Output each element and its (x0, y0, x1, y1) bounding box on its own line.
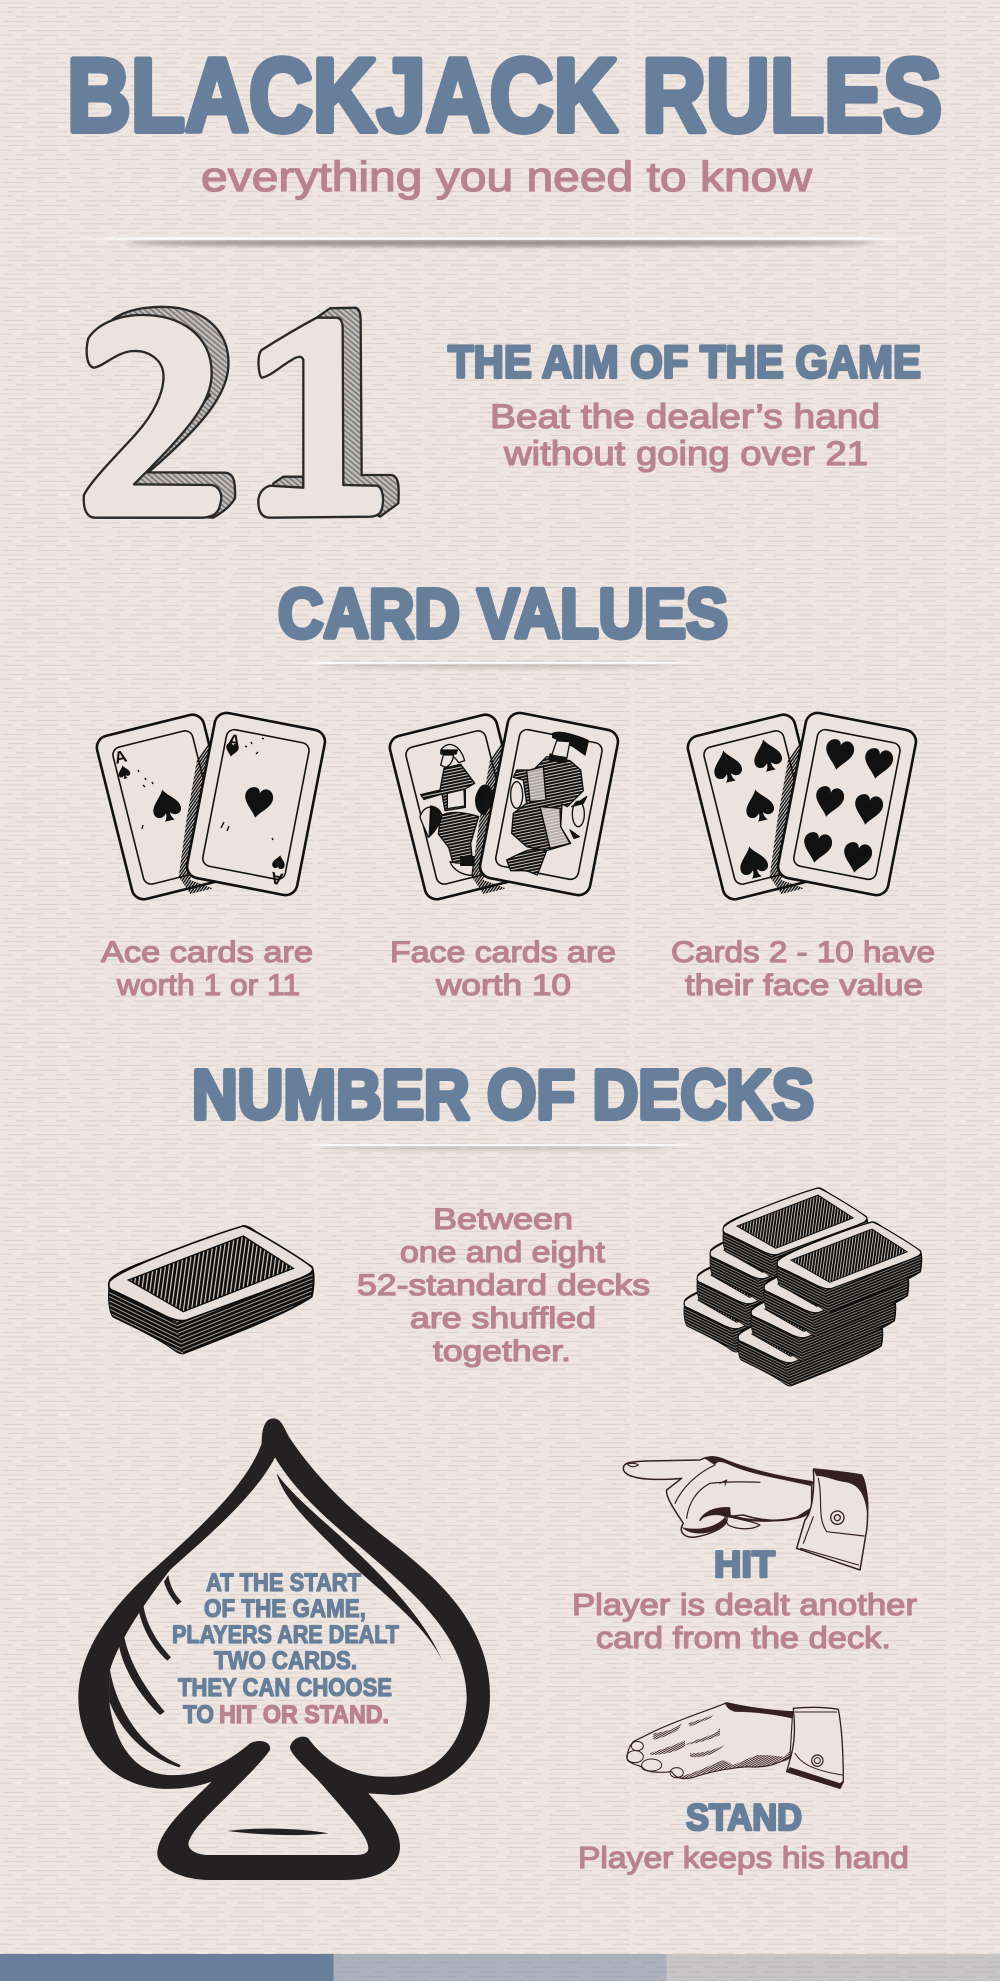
digit 1 (258, 308, 399, 518)
caption: number cards: their face value (685, 969, 923, 1002)
icon: face cards (387, 711, 620, 902)
icon: pointing hand (hit) (623, 1456, 868, 1570)
heading: the aim of the game: THE AIM OF THE GAME (448, 336, 921, 388)
text: inside the spade: TO (183, 1701, 214, 1729)
text: number of decks description: one and eight (400, 1236, 606, 1269)
text: hit description (572, 1587, 917, 1655)
caption: ace cards: Ace cards are (101, 936, 313, 969)
text: inside the spade (172, 1569, 399, 1729)
section divider (290, 662, 710, 668)
icon: single deck (109, 1226, 314, 1353)
caption: ace cards: worth 1 or 11 (116, 969, 300, 1002)
text: number of decks description: Between (433, 1203, 573, 1236)
caption: number cards (671, 936, 935, 1002)
caption: face cards: worth 10 (435, 969, 571, 1002)
text: inside the spade: PLAYERS ARE DEALT (172, 1621, 399, 1649)
icon: large spade outline (78, 1418, 490, 1880)
subtitle: everything you need to know (201, 153, 813, 200)
icon: ace cards: A (112, 746, 129, 768)
icon: number 21 (84, 307, 399, 518)
caption: number cards: Cards 2 - 10 have (671, 936, 935, 969)
text: number of decks description: together. (433, 1335, 571, 1368)
caption: face cards: Face cards are (390, 936, 616, 969)
icon: ace cards: A (269, 868, 285, 889)
icon: stack of decks (684, 1188, 922, 1386)
text: number of decks description: are shuffled (410, 1302, 596, 1335)
text: hit description: card from the deck. (596, 1620, 891, 1655)
text: aim description: without going over 21 (503, 435, 868, 473)
text: aim description (490, 398, 880, 473)
icon: number cards (685, 711, 918, 902)
text: hit description: Player is dealt another (572, 1587, 917, 1622)
figure: king (507, 732, 588, 875)
heading: hit: HIT (714, 1544, 775, 1585)
text: inside the spade: THEY CAN CHOOSE (178, 1674, 392, 1702)
section divider (290, 1144, 710, 1150)
header divider (60, 237, 940, 246)
icon: ace cards: A (226, 730, 242, 751)
footer colour bar (0, 1954, 1000, 1981)
icon: ace cards (94, 711, 327, 902)
text: number of decks description: 52-standard decks (357, 1269, 650, 1302)
heading: stand: STAND (686, 1797, 802, 1838)
heading: card values: CARD VALUES (278, 574, 728, 652)
caption: ace cards (101, 936, 313, 1002)
text: inside the spade: AT THE START (206, 1569, 361, 1597)
heading: number of decks: NUMBER OF DECKS (192, 1056, 814, 1134)
icon: flat hand (stand) (627, 1703, 843, 1788)
figure: jack (420, 745, 494, 875)
text: stand description: Player keeps his hand (578, 1840, 909, 1875)
text: number of decks description (357, 1203, 650, 1368)
text: inside the spade: OF THE GAME, (204, 1595, 366, 1623)
digit 2 (84, 307, 235, 518)
text: inside the spade: HIT OR STAND. (219, 1701, 389, 1729)
caption: face cards (390, 936, 616, 1002)
text: aim description: Beat the dealer’s hand (490, 398, 880, 436)
text: inside the spade: TWO CARDS. (214, 1647, 357, 1675)
